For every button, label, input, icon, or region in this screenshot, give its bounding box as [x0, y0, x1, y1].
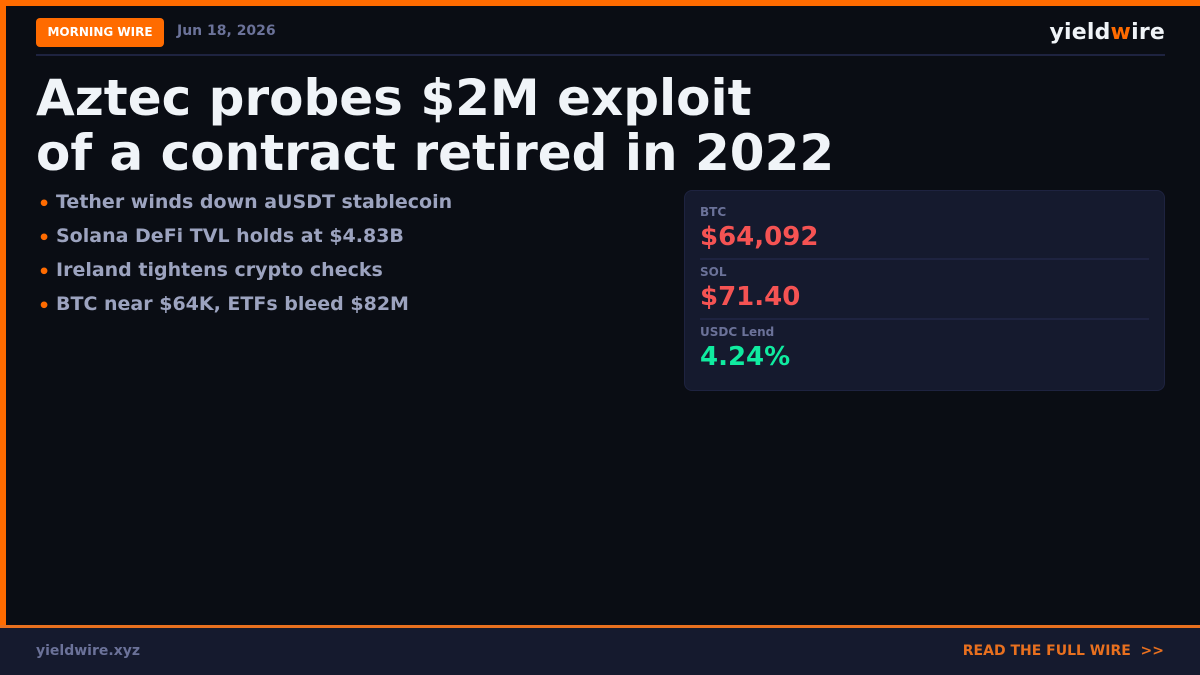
bullet 2: •	[38, 227, 50, 249]
date: Jun 18, 2026	[177, 23, 276, 39]
bullet 2: Solana DeFi TVL holds at $4.83B	[56, 225, 404, 247]
footer site url: yieldwire.xyz	[36, 643, 140, 659]
bullet 1: Tether winds down aUSDT stablecoin	[56, 191, 452, 213]
headline: Aztec probes $2M exploit	[36, 69, 752, 127]
bullet list	[38, 191, 452, 317]
panel: market stats	[684, 190, 1165, 391]
stat: SOL: SOL	[700, 265, 726, 279]
stat: SOL	[700, 265, 800, 312]
badge: morning wire	[36, 18, 164, 47]
footer bar	[0, 625, 1200, 675]
stat: SOL: $71.40	[700, 282, 800, 312]
stat: BTC	[700, 205, 818, 252]
stat: BTC: BTC	[700, 205, 726, 219]
stat: USDC Lend	[700, 325, 790, 372]
stat: BTC: $64,092	[700, 222, 818, 252]
headline: of a contract retired in 2022	[36, 124, 834, 182]
bullet 4: •	[38, 295, 50, 317]
badge: morning wire: MORNING WIRE	[47, 25, 153, 39]
bullet 1: •	[38, 193, 50, 215]
bullet 3: •	[38, 261, 50, 283]
bullet 3: Ireland tightens crypto checks	[56, 259, 383, 281]
headline	[36, 69, 834, 182]
left accent bar	[0, 0, 6, 675]
bullet 4: BTC near $64K, ETFs bleed $82M	[56, 293, 409, 315]
brand logo: yieldwire	[1049, 20, 1165, 45]
top accent bar	[0, 0, 1200, 6]
stat: USDC Lend: USDC Lend	[700, 325, 774, 339]
stat: USDC Lend: 4.24%	[700, 342, 790, 372]
footer call to action: READ THE FULL WIRE >>	[963, 643, 1164, 659]
